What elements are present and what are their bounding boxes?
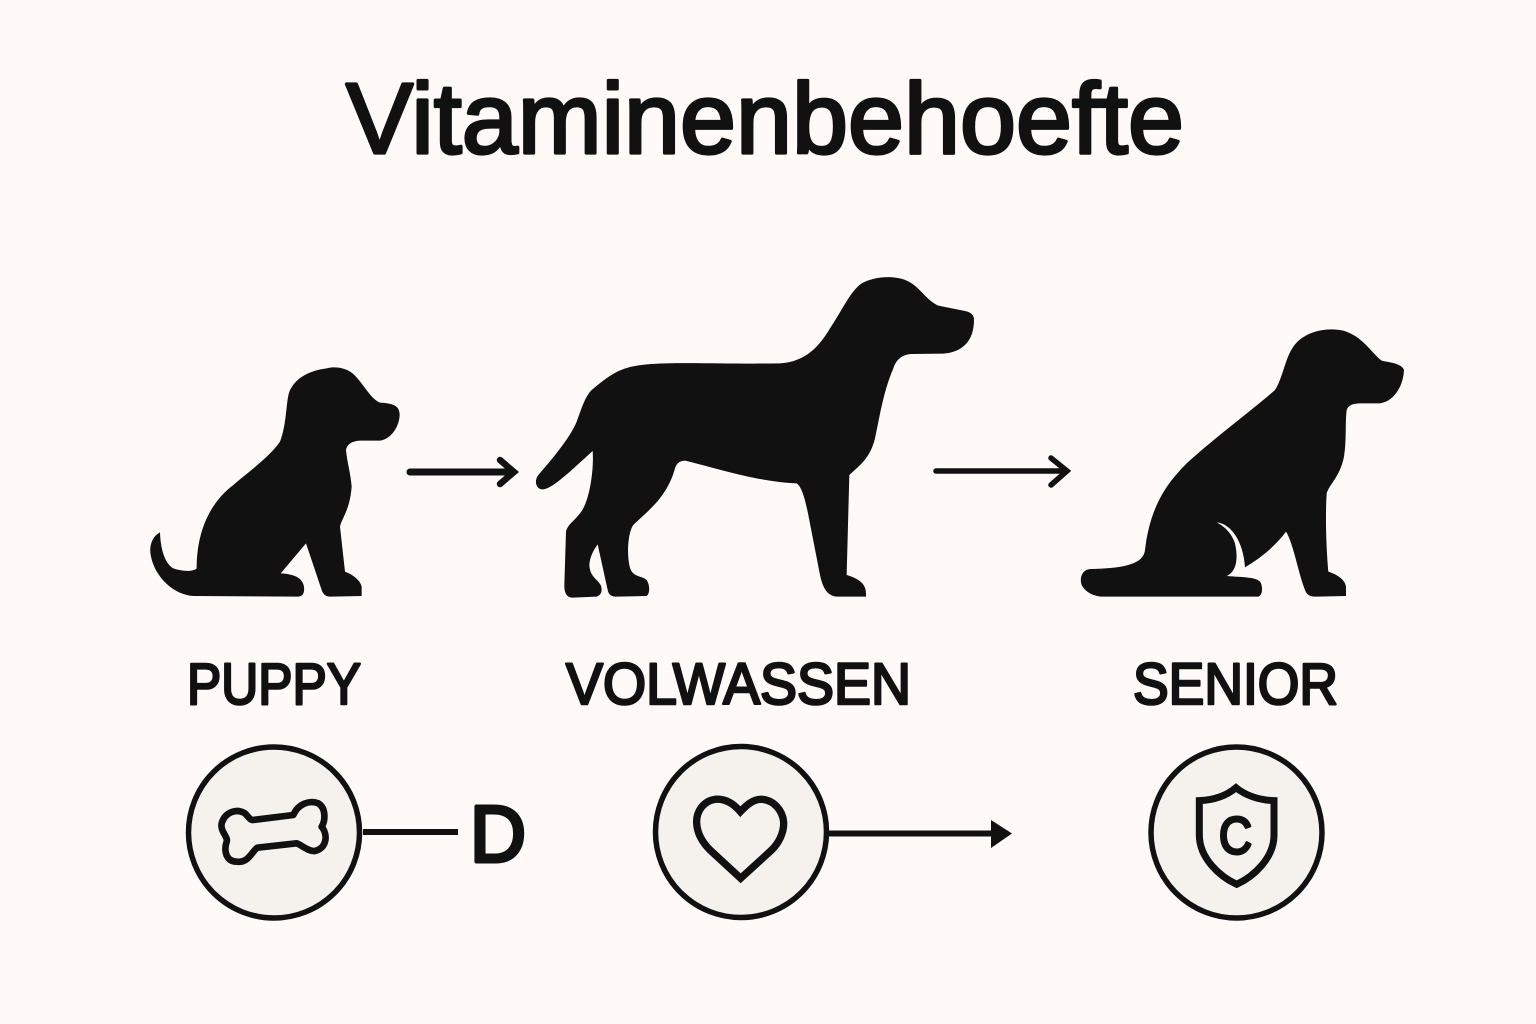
icon: puppy silhouette [150,367,400,597]
arrow: adult to senior [936,458,1067,485]
connector: bone badge to vitamin D [363,829,458,835]
arrow: puppy to adult [410,460,514,484]
icon: senior dog silhouette [1081,329,1404,597]
icon: shield badge with C: C [1219,808,1252,866]
icon: adult dog silhouette [536,277,974,598]
icon: heart badge [656,746,826,918]
icon: shield badge with C [1151,747,1322,918]
title: Vitaminenbehoefte [346,63,1184,175]
vitamin D letter: D [470,790,526,878]
label: senior: SENIOR [1133,652,1338,717]
label: puppy: PUPPY [187,652,361,717]
label: volwassen: VOLWASSEN [566,652,911,717]
icon: bone badge [188,747,360,918]
arrow: heart badge to right [828,820,1012,848]
